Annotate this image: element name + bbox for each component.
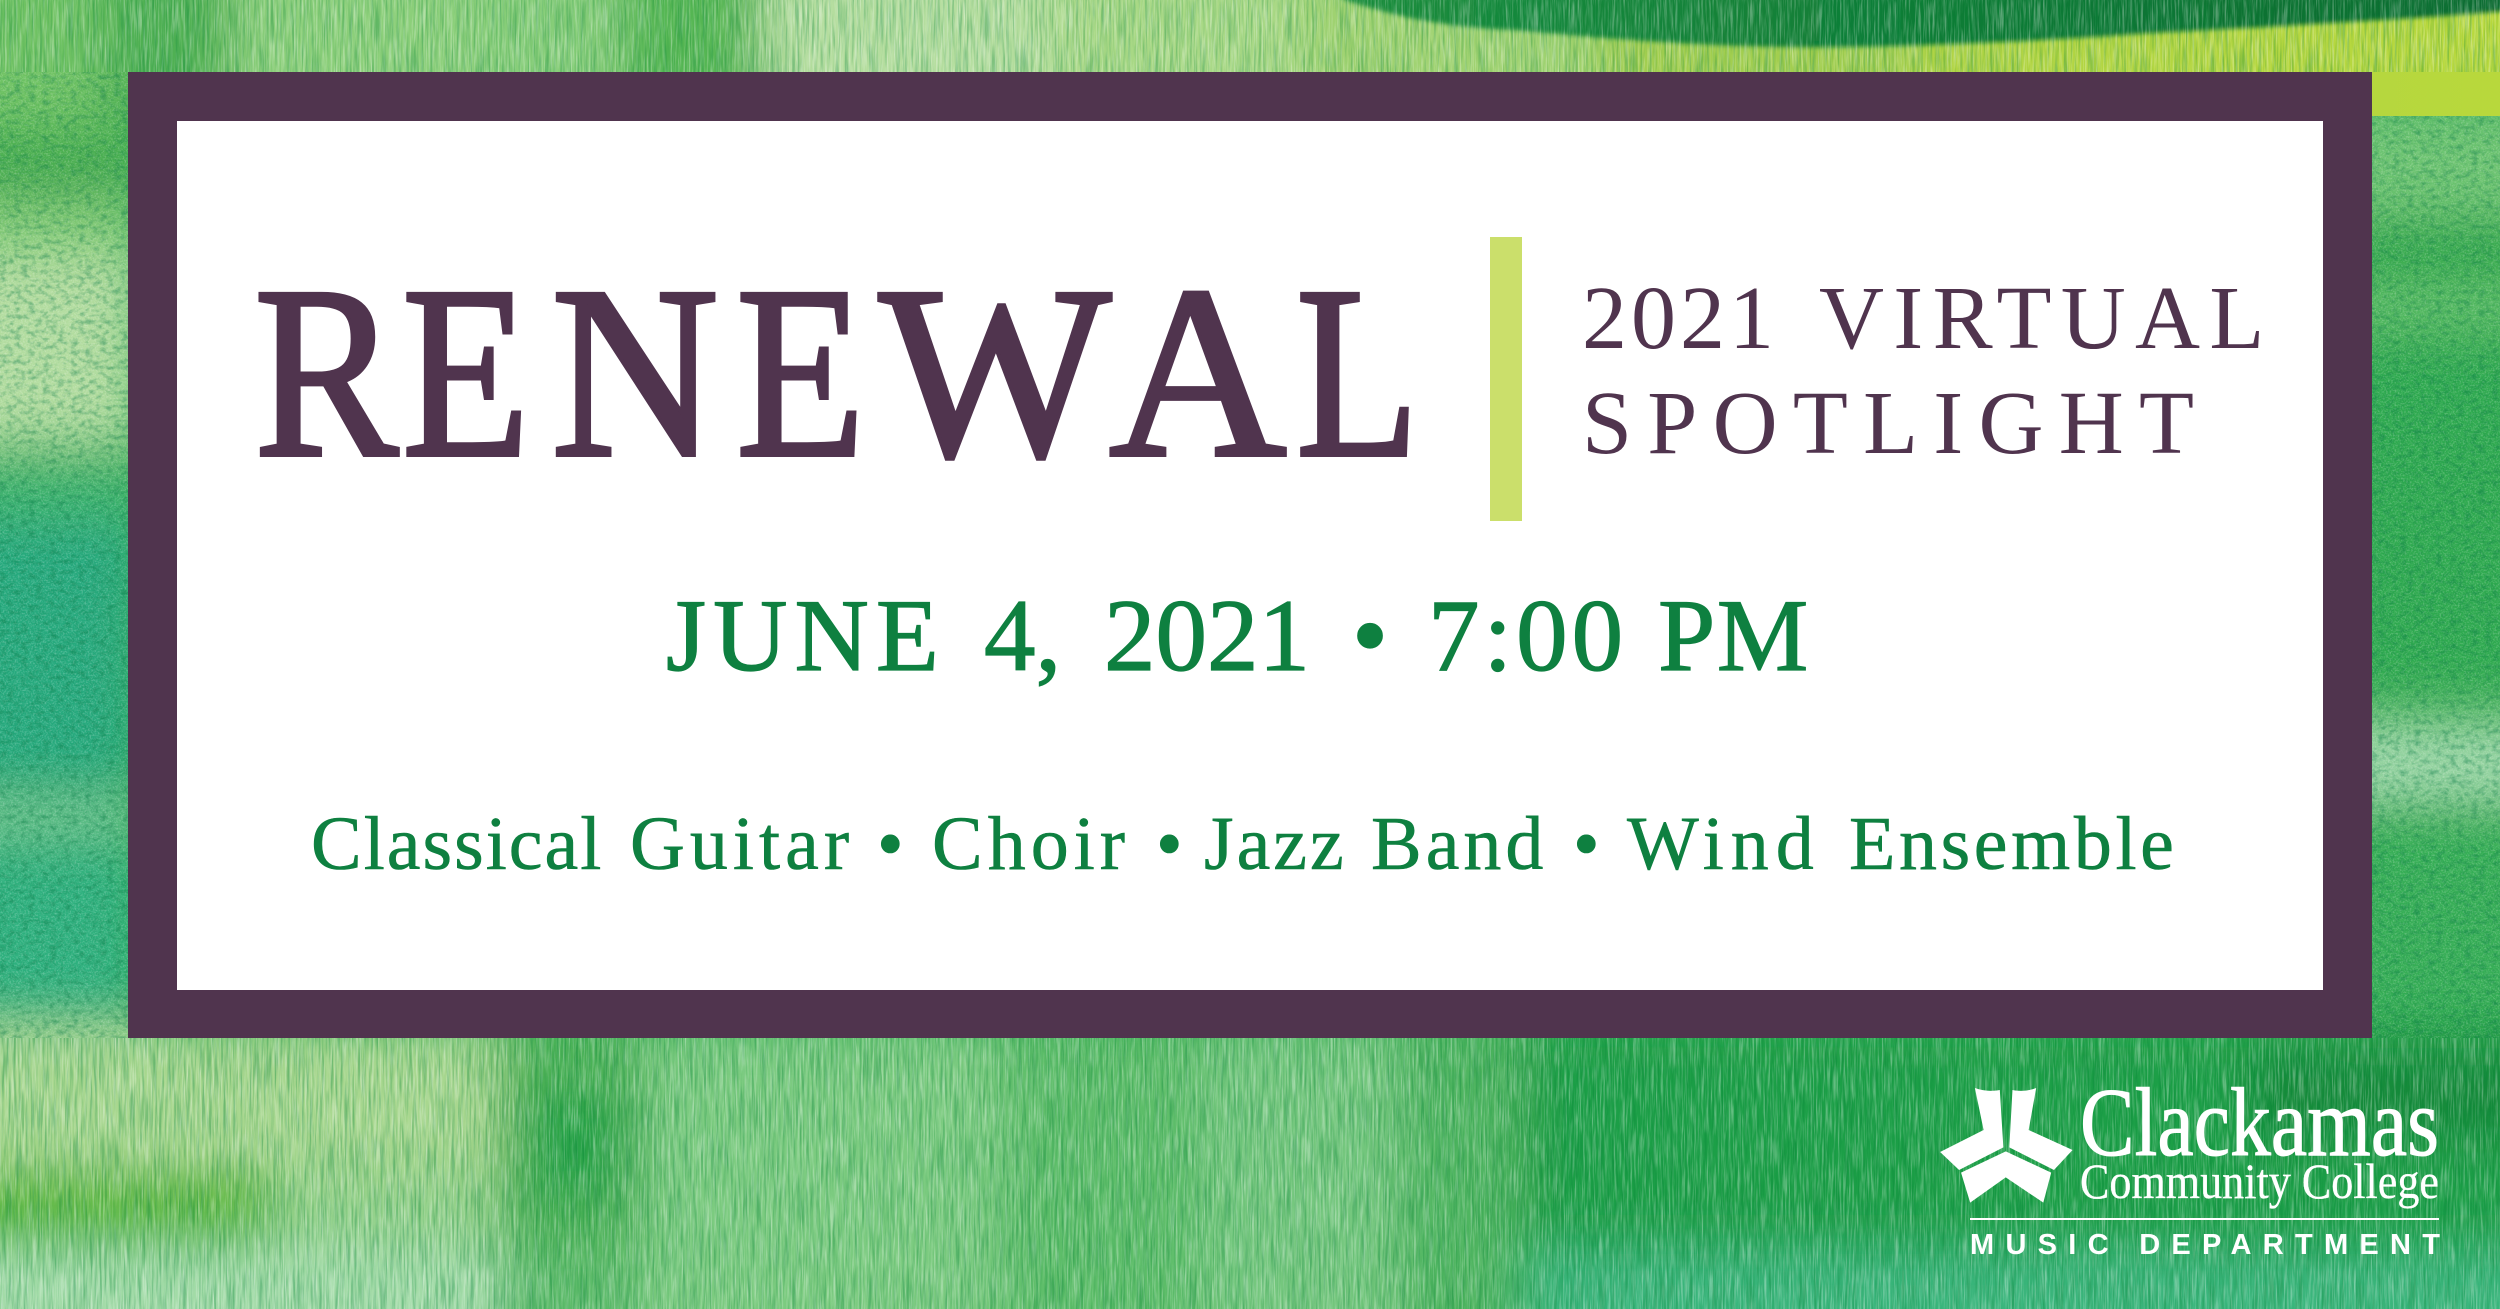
ensembles list: Classical — [311, 802, 603, 886]
date and time: 4, — [984, 579, 1061, 693]
ensembles list: Ensemble — [1849, 802, 2178, 886]
department label: MUSIC DEPARTMENT — [1970, 1229, 2440, 1261]
date and time: 2021 — [1104, 579, 1310, 693]
white panel interior — [177, 121, 2323, 990]
title: RENEWAL: A — [1109, 237, 1287, 509]
title: RENEWAL: E — [736, 237, 865, 509]
subtitle: 2021 Virtual Spotlight: SPOTLIGHT — [1582, 374, 2194, 473]
subtitle: 2021 Virtual Spotlight: 2021 — [1582, 269, 1778, 368]
title: RENEWAL: W — [879, 237, 1111, 509]
logo rule — [1970, 1218, 2439, 1220]
accent divider bar — [1490, 237, 1522, 521]
bottom band columns — [0, 1025, 500, 1170]
title: RENEWAL: E — [402, 237, 530, 509]
logo wordmark: Clackamas — [2080, 1069, 2439, 1176]
ensembles list: Choir — [932, 802, 1130, 886]
ensembles list: • — [1156, 802, 1183, 886]
ensembles list: Guitar — [630, 802, 854, 886]
ensembles list: Wind — [1627, 802, 1821, 886]
title: RENEWAL: N — [551, 237, 719, 509]
title: RENEWAL: R — [254, 237, 398, 509]
top band columns — [0, 0, 100, 130]
right strip bands — [2330, 105, 2500, 220]
left strip bands — [0, 120, 140, 160]
subtitle: 2021 Virtual Spotlight: VIRTUAL — [1819, 269, 2274, 368]
ensembles list: • — [877, 802, 904, 886]
date and time: • — [1352, 579, 1388, 693]
icon: college emblem — [1940, 1088, 2073, 1203]
dark wash top right — [1320, 0, 2500, 47]
date and time: JUNE — [666, 579, 946, 693]
ensembles list: • — [1573, 802, 1600, 886]
ensembles list: Band — [1371, 802, 1547, 886]
title: RENEWAL: L — [1296, 237, 1419, 509]
logo wordmark: Community College — [2080, 1153, 2439, 1209]
ensembles list: Jazz — [1204, 802, 1347, 886]
logo wordmark — [2080, 1069, 2439, 1209]
lime wash — [1880, 0, 2500, 116]
purple framed panel — [128, 72, 2372, 1038]
date and time: 7:00 — [1428, 579, 1627, 693]
date and time: PM — [1658, 579, 1810, 693]
logo: Clackamas Community College Music Department — [1940, 1069, 2440, 1261]
subtitle: 2021 Virtual Spotlight — [1582, 269, 2274, 473]
